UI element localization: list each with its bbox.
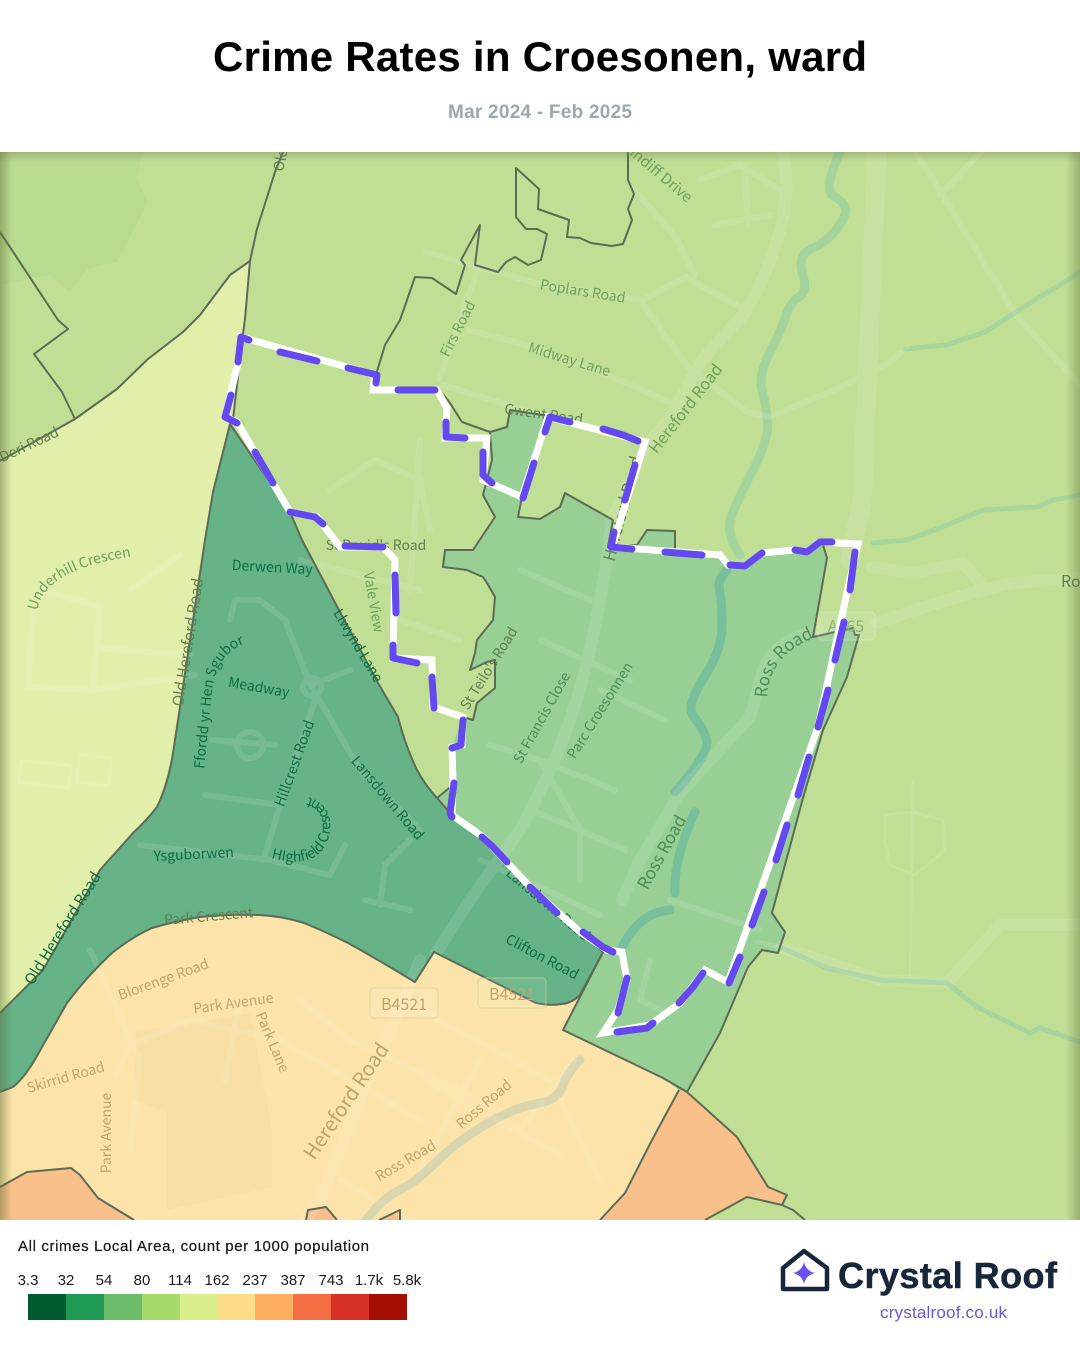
legend colour scale: [28, 1294, 407, 1320]
area boundary lines: [0, 152, 859, 1220]
street labels: St Francis Close: [508, 668, 575, 767]
street labels: Ross Road: [630, 810, 691, 893]
street labels: Parc Croesonnen: [562, 658, 638, 763]
street labels: Blorenge Road: [115, 954, 212, 1005]
street labels: Derwen Way: [231, 555, 314, 579]
street labels: Hereford Road: [642, 358, 727, 458]
street labels: Gwent Road: [503, 399, 584, 429]
region: deeper orange south-west: [0, 1168, 134, 1220]
street labels: Park Lane: [251, 1009, 294, 1076]
legend tick values: 1.7k: [355, 1272, 384, 1289]
subtitle: date range: Mar 2024 - Feb 2025: [448, 102, 632, 123]
road shields: A465: [828, 613, 864, 637]
legend tick values: [18, 1272, 422, 1289]
street labels: Firs Road: [435, 297, 480, 360]
street labels: Llwynd Lane: [329, 605, 388, 686]
map edge fade: [0, 152, 1080, 1220]
title: Crime Rates in Croesonen, ward: [213, 33, 867, 80]
street labels: St David's Road: [326, 535, 426, 555]
legend tick values: 80: [134, 1272, 150, 1289]
legend tick values: 387: [280, 1272, 306, 1289]
legend tick values: 32: [58, 1272, 74, 1289]
street labels: Old Hereford Road: [268, 51, 313, 173]
street labels: Skirrid Road: [24, 1057, 107, 1098]
street labels: Ffordd yr Hen Sgubor: [194, 636, 242, 768]
icon: house with star: [783, 1251, 827, 1289]
street labels: Hillcrest Road: [269, 717, 319, 809]
legend tick values: 162: [204, 1272, 230, 1289]
street labels: Ross Road: [754, 626, 812, 696]
legend: [18, 1238, 422, 1320]
street labels: Lansdown Road: [347, 751, 429, 844]
region: deeper orange south-east: [600, 1090, 787, 1220]
road network: [19, 152, 1080, 1220]
street labels: Hereford Road: [295, 1036, 395, 1164]
street labels: Park Avenue: [192, 988, 275, 1019]
choropleth map: [0, 152, 1080, 1220]
legend title: All crimes Local Area, count per 1000 population: [18, 1238, 369, 1255]
rivers: [366, 152, 1080, 1220]
logo wordmark: Crystal Roof: [838, 1255, 1058, 1296]
street labels: Hereford Road: [596, 453, 647, 563]
street labels: Ysguborwen: [152, 842, 234, 866]
street labels: Lansdown Road: [502, 863, 595, 945]
website: crystalroof.co.uk: [880, 1303, 1008, 1322]
legend tick values: 114: [168, 1272, 192, 1289]
street labels: Ross Road: [452, 1075, 516, 1133]
street labels: Ross Road: [371, 1135, 440, 1186]
street labels: Midway Lane: [526, 337, 613, 381]
legend tick values: 3.3: [18, 1272, 38, 1289]
street labels: Old Hereford Road: [167, 577, 208, 708]
legend tick values: 743: [318, 1272, 344, 1289]
street labels: St Teilo's Road: [455, 623, 522, 714]
road shields: B4521: [381, 991, 427, 1015]
region: orange-cream area: [0, 900, 679, 1220]
region: pale yellow-green area: [0, 261, 250, 1013]
road shields: [370, 612, 875, 1018]
street labels: Park Avenue: [96, 1092, 116, 1173]
street labels: Vale View: [359, 570, 389, 634]
road shields: B4521: [489, 981, 535, 1005]
region: mid green ward area: [437, 410, 859, 1092]
street labels: Park Crescent: [163, 902, 255, 930]
legend tick values: 237: [242, 1272, 268, 1289]
ward boundary: white outline with purple dashes: [225, 337, 858, 1033]
street labels: Maindiff Drive: [610, 129, 697, 207]
street labels: Old Hereford Road: [19, 868, 106, 988]
street labels: Poplars Road: [539, 274, 627, 308]
logo: Crystal Roof: [783, 1251, 1058, 1322]
street labels: Clifton Road: [502, 929, 582, 984]
street labels: [0, 152, 1080, 1181]
street labels: Meadway: [227, 672, 292, 702]
legend tick values: 5.8k: [393, 1272, 422, 1289]
legend tick values: 54: [96, 1272, 112, 1289]
street labels: HIghfield Crescent: [272, 797, 330, 865]
region: dark green west of the ward: [0, 424, 603, 1092]
